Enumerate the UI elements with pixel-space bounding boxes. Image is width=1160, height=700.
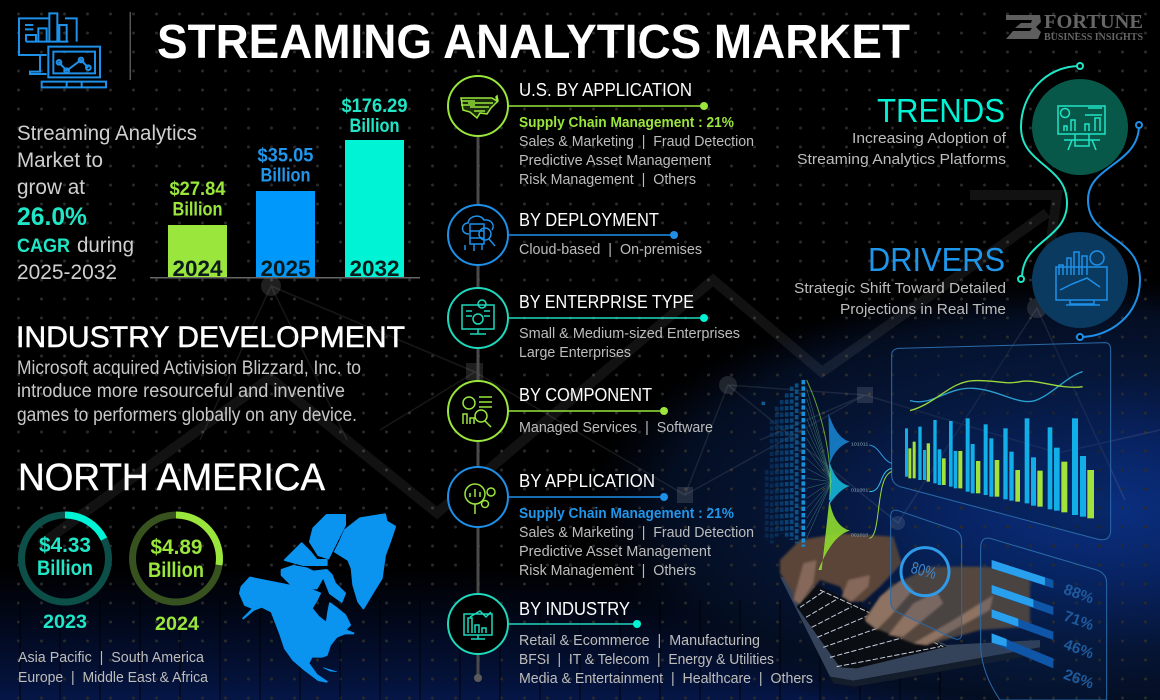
text block: market growth: 26.0% xyxy=(17,203,87,231)
segment: U.S. by application: Supply Chain Management : 21% xyxy=(519,115,734,131)
logo: Fortune Business Insights: BUSINESS INSIGHTS xyxy=(1044,32,1143,43)
data stream: 101011 xyxy=(851,441,869,447)
text block: market growth xyxy=(17,122,197,284)
connector: teal curve xyxy=(1018,63,1083,282)
donut: 2024 xyxy=(132,515,220,635)
title divider xyxy=(130,12,131,80)
segment: by component: BY COMPONENT xyxy=(519,385,652,405)
text block: other regions xyxy=(18,649,209,686)
panel: percentage bars: 26% xyxy=(1061,666,1096,693)
icon: monitor with line chart xyxy=(448,594,508,654)
bar: 2024 xyxy=(168,179,227,281)
donut: 2024: 2024 xyxy=(155,614,199,635)
bar: 2032: Billion xyxy=(350,116,400,137)
segment: by enterprise type: BY ENTERPRISE TYPE xyxy=(519,292,694,312)
segment: U.S. by application: Sales & Marketing | Fraud Detection xyxy=(519,133,754,150)
donut: 2023 xyxy=(22,515,108,633)
segment: by enterprise type: Small & Medium-sized Enterprises xyxy=(519,325,740,342)
text block: market growth: Market to xyxy=(17,149,103,172)
data stream: 001010 xyxy=(851,533,869,539)
segment: by component: Managed Services | Software xyxy=(519,419,713,436)
bar: 2032: $176.29 xyxy=(342,96,408,117)
donut: 2023: Billion xyxy=(37,557,93,580)
segment: by application xyxy=(448,467,754,579)
data stream xyxy=(763,380,892,570)
segment: by industry xyxy=(448,594,813,687)
icon: monitor with gear xyxy=(448,288,508,348)
icon: trends dashboard xyxy=(1032,79,1128,175)
segment: U.S. by application: Risk Management | Others xyxy=(519,171,696,188)
segment: by deployment: BY DEPLOYMENT xyxy=(519,210,659,230)
icon: magnifier with gears xyxy=(448,467,508,527)
panel: 80% gauge: 80% xyxy=(909,558,938,583)
timeline spine xyxy=(474,90,482,682)
donut: 2024: $4.89 xyxy=(150,536,202,559)
segment: by application: Risk Management | Others xyxy=(519,562,696,579)
panel: trends: Streaming Analytics Platforms xyxy=(797,151,1006,168)
hands xyxy=(780,533,1030,645)
segment: by component xyxy=(448,381,713,441)
bar: 2032: 2032 xyxy=(350,256,400,281)
laptop body xyxy=(780,577,1040,681)
bar chart: market size xyxy=(150,96,420,281)
connector: blue curve xyxy=(1077,122,1142,340)
donut: 2023: 2023 xyxy=(43,612,87,633)
panel: 80% gauge xyxy=(891,510,962,639)
segment: by application: Supply Chain Management : 21% xyxy=(519,506,734,522)
heading: industry development: INDUSTRY DEVELOPMENT xyxy=(16,321,405,354)
bar: 2032 xyxy=(342,96,408,281)
segment: by application: Predictive Asset Management xyxy=(519,543,712,560)
segment: by industry: Retail & Ecommerce | Manufacturing xyxy=(519,632,760,649)
text block: other regions: Europe | Middle East & Africa xyxy=(18,669,209,686)
segment: by deployment: Cloud-based | On-premises xyxy=(519,241,702,258)
segment: U.S. by application: U.S. BY APPLICATION xyxy=(519,80,692,100)
bar: 2024: Billion xyxy=(172,200,222,220)
segment: by industry: BY INDUSTRY xyxy=(519,599,630,619)
segment: by industry: BFSI | IT & Telecom | Energy & Utilities xyxy=(519,651,774,668)
segment: U.S. by application: Predictive Asset Management xyxy=(519,152,712,169)
donut: 2023: $4.33 xyxy=(39,534,91,557)
bar: 2024: $27.84 xyxy=(170,179,226,200)
photo: laptop and holographic dashboard xyxy=(763,343,1111,700)
panel: trends: Increasing Adoption of xyxy=(852,130,1007,147)
text block: industry development: Microsoft acquired Activision Blizzard, Inc. to xyxy=(17,358,361,379)
panel: drivers xyxy=(794,232,1128,328)
logo: Fortune Business Insights xyxy=(1006,11,1143,43)
text block: industry development xyxy=(17,358,361,426)
heading: north america: NORTH AMERICA xyxy=(18,457,326,499)
logo: Fortune Business Insights: FORTUNE xyxy=(1044,11,1143,33)
title: STREAMING ANALYTICS MARKET xyxy=(157,16,910,69)
panel: percentage bars: 71% xyxy=(1061,608,1096,634)
text block: market growth: 2025-2032 xyxy=(17,261,117,284)
bar: 2025 xyxy=(256,146,315,281)
text block: industry development: introduce more resourceful and inventive xyxy=(17,381,345,402)
text block: industry development: games to performers globally on any device. xyxy=(17,405,357,426)
text block: other regions: Asia Pacific | South America xyxy=(18,649,205,666)
panel: percentage bars: 46% xyxy=(1061,636,1096,663)
panel: bar chart hologram xyxy=(892,343,1111,540)
segment: by industry: Media & Entertainment | Healthcare | Others xyxy=(519,670,813,687)
segment: U.S. by application xyxy=(448,76,754,188)
bar: 2025: Billion xyxy=(260,166,310,186)
keyboard xyxy=(797,585,947,668)
bar: 2024: 2024 xyxy=(172,256,223,281)
bar: 2025: $35.05 xyxy=(258,146,314,166)
text block: market growth: Streaming Analytics xyxy=(17,122,197,145)
panel: drivers: Strategic Shift Toward Detailed xyxy=(794,280,1006,297)
laptop and hands xyxy=(780,533,1040,687)
bar: 2025: 2025 xyxy=(260,256,310,281)
icon: monitors with charts xyxy=(19,13,106,87)
data stream: 011001 xyxy=(851,487,869,493)
text block: market growth: during xyxy=(77,234,134,257)
panel: trends xyxy=(797,79,1128,175)
panel: percentage bars xyxy=(981,538,1107,700)
panel: trends: TRENDS xyxy=(877,92,1005,129)
map: north america xyxy=(240,514,395,682)
text block: market growth: grow at xyxy=(17,176,85,199)
segment: by enterprise type xyxy=(448,288,740,361)
donut: 2024: Billion xyxy=(148,559,204,582)
icon: chart with magnifier xyxy=(448,381,508,441)
segment: by application: Sales & Marketing | Fraud Detection xyxy=(519,524,754,541)
icon: cloud database xyxy=(448,205,508,265)
icon: US flag map xyxy=(448,76,508,136)
segment: by application: BY APPLICATION xyxy=(519,471,655,491)
icon: drivers dashboard xyxy=(1032,232,1128,328)
segment: by deployment xyxy=(448,205,702,265)
panel: drivers: DRIVERS xyxy=(868,241,1005,278)
panel: drivers: Projections in Real Time xyxy=(840,301,1006,318)
segment: by enterprise type: Large Enterprises xyxy=(519,344,631,361)
panel: percentage bars: 88% xyxy=(1061,581,1096,608)
text block: market growth: CAGR xyxy=(17,236,70,257)
